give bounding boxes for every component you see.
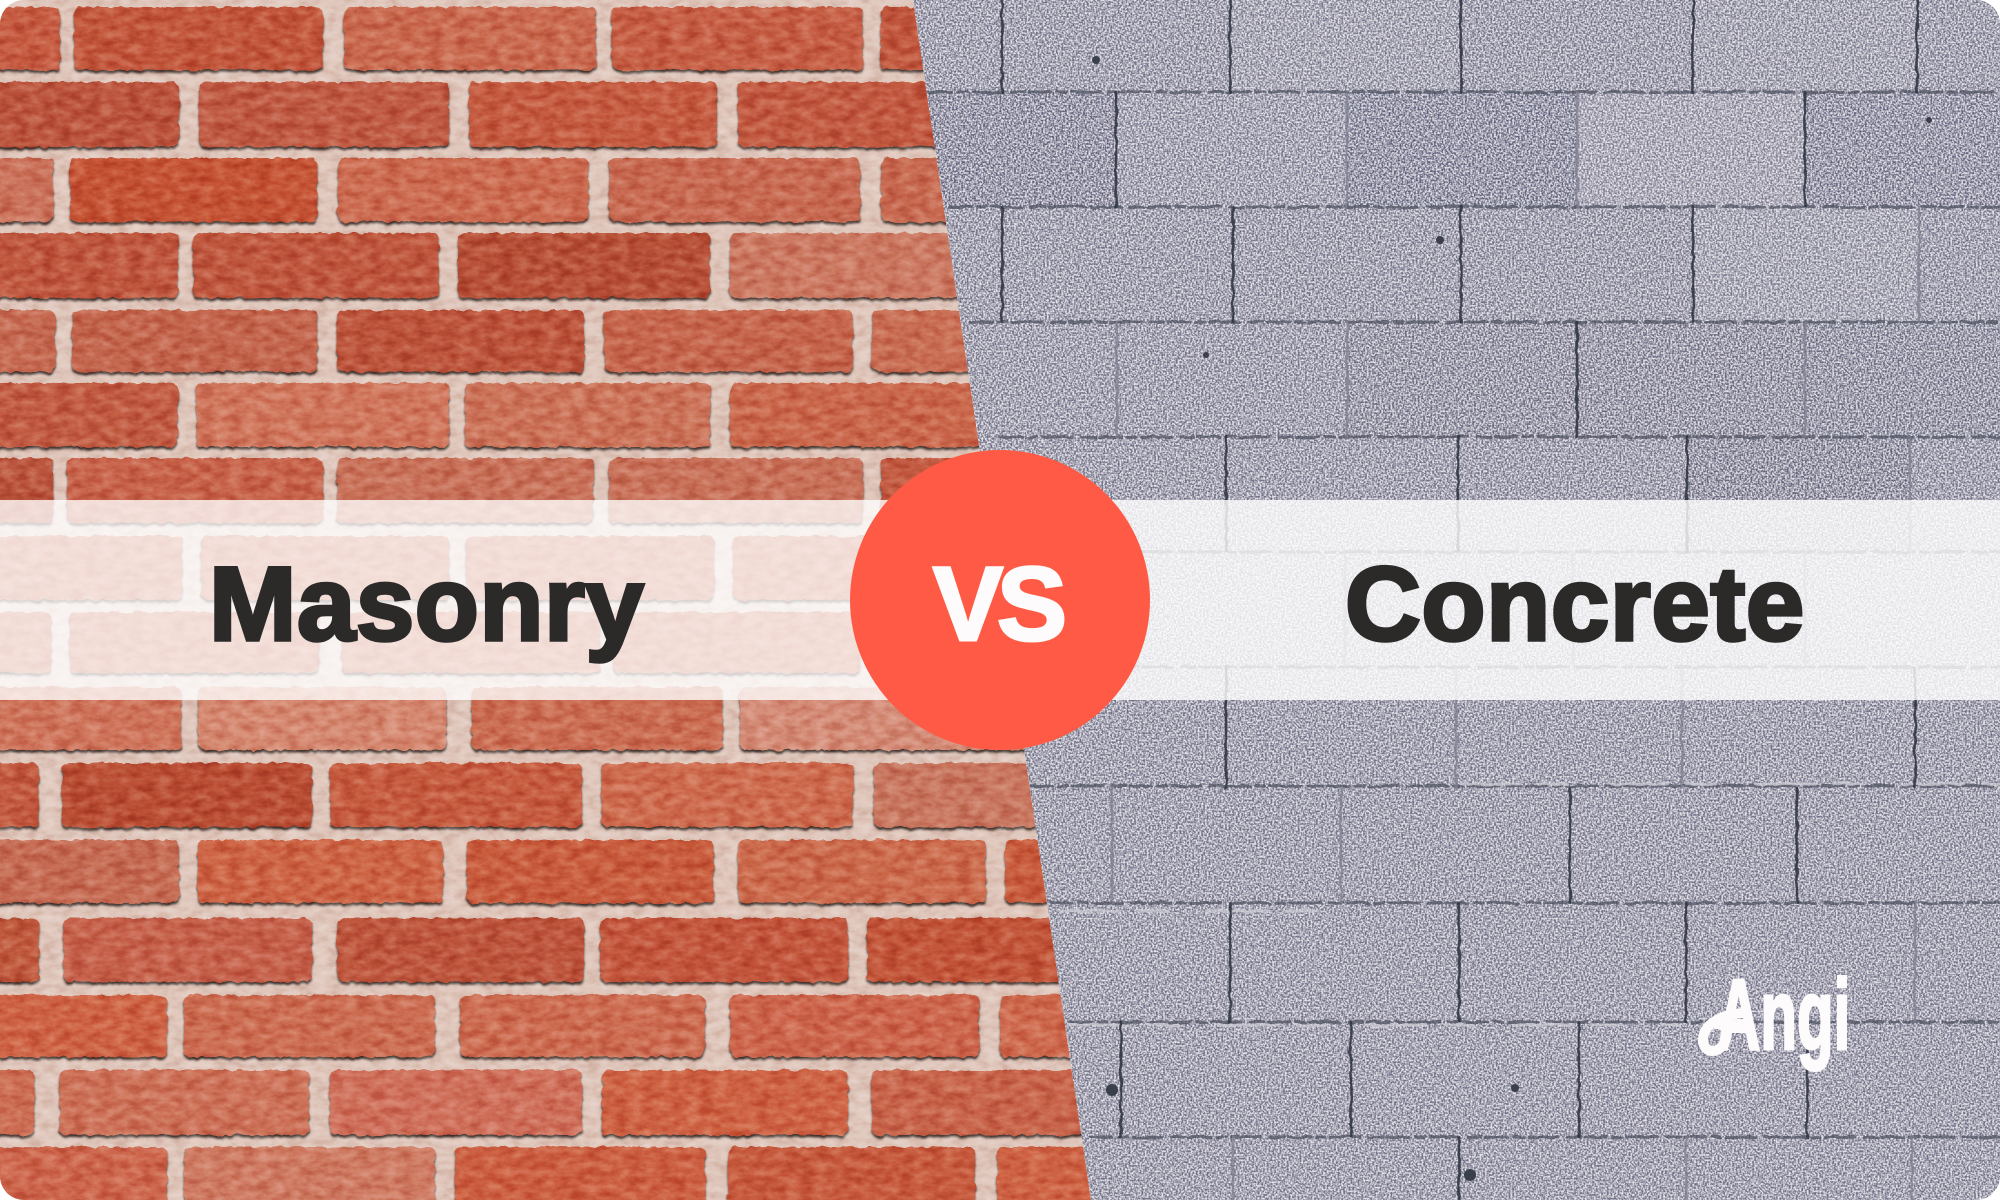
- logo: Angi: [1698, 975, 1847, 1072]
- title band over masonry: [0, 500, 888, 700]
- logo swash: [1703, 1013, 1744, 1051]
- title band over concrete: [1112, 500, 2000, 700]
- logo wordmark: Angi: [1717, 959, 1850, 1071]
- vs label: VS: [933, 546, 1063, 663]
- heading: Masonry: Masonry: [209, 546, 644, 663]
- heading: Concrete: Concrete: [1345, 546, 1805, 663]
- vs badge: [850, 450, 1150, 750]
- badge circle: [850, 450, 1150, 750]
- mortar joints: [930, 0, 2000, 1200]
- concrete grain: [900, 0, 2000, 1200]
- brick texture: [0, 0, 1100, 1200]
- mortar background: [0, 0, 1100, 1200]
- brick courses: [0, 7, 1110, 1200]
- concrete block tints: [927, 92, 2000, 500]
- panel: masonry brick wall: [0, 0, 1110, 1200]
- panel: concrete block wall: [900, 0, 2000, 1200]
- concrete base: [900, 0, 2000, 1200]
- concrete pits: [1092, 56, 1932, 1181]
